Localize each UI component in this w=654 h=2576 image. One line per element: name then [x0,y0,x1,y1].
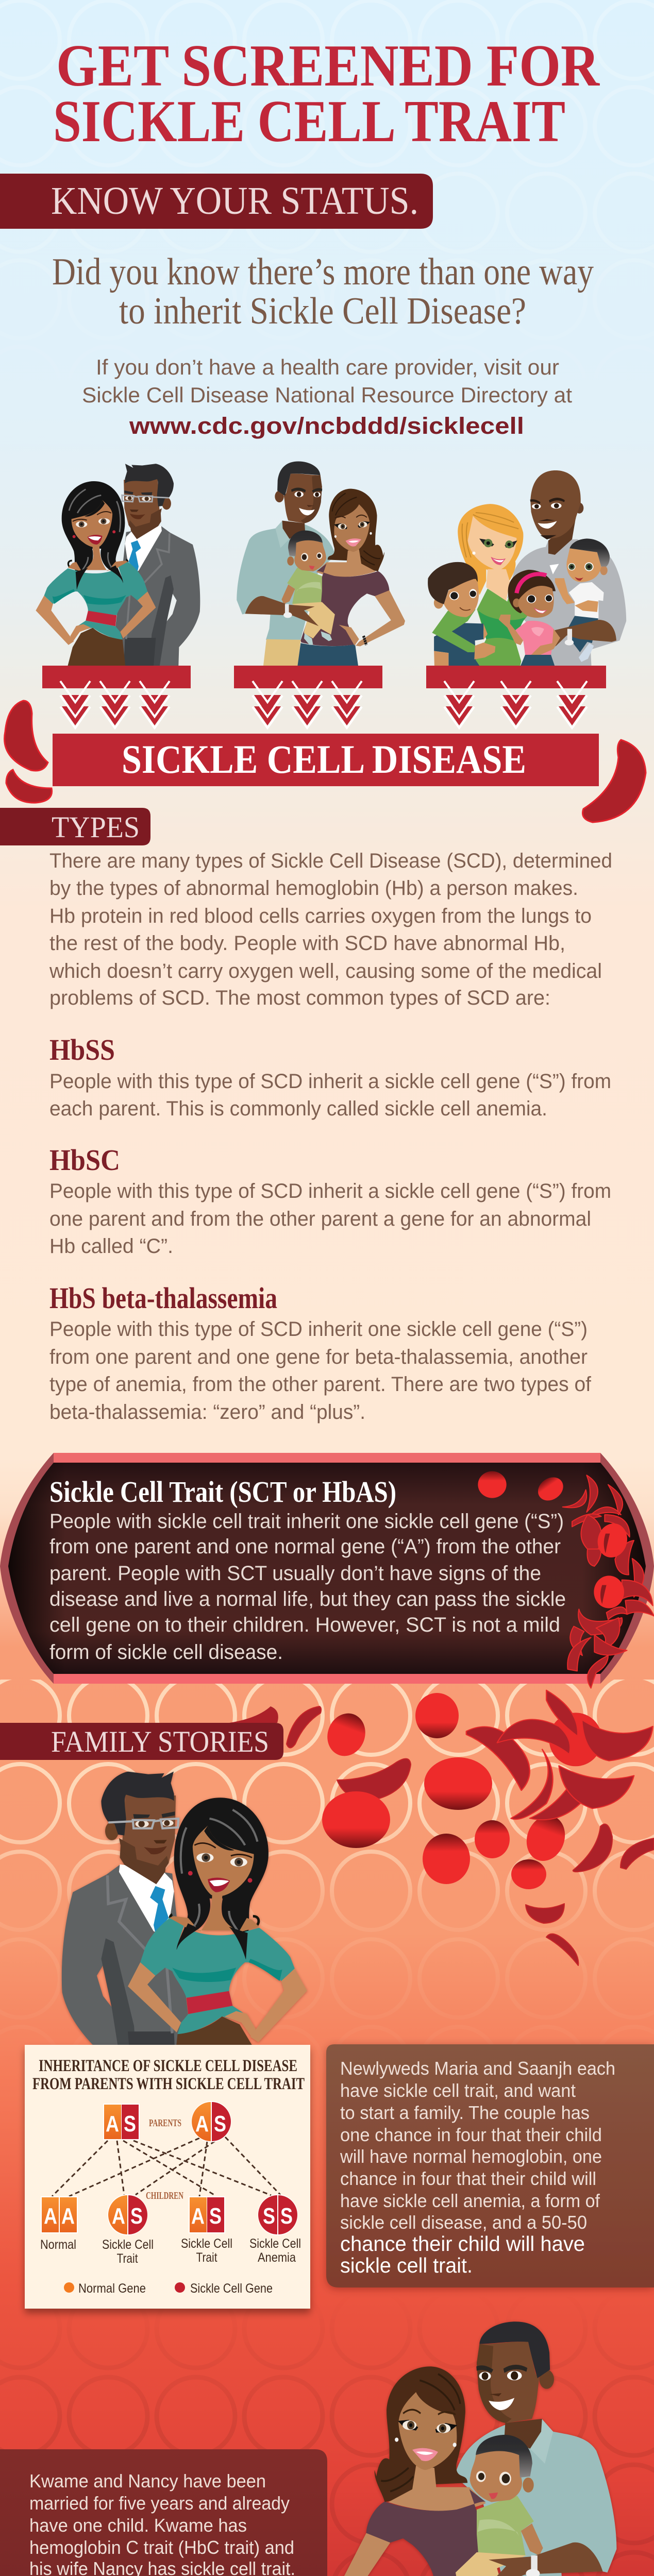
text block: types intro: by the types of abnormal hemoglobin (Hb) a person makes. [49,877,578,900]
inheritance lines [52,2137,280,2196]
section: HbS beta-thalassemia: beta-thalassemia: “zero” and “plus”. [49,1401,365,1423]
banner: know your status: KNOW YOUR STATUS. [51,179,418,223]
arrows: couple [60,681,170,728]
parent token: AS square [103,2104,140,2140]
diagram title [32,2057,305,2093]
arrows: family of five [444,681,587,728]
text block: sickle cell trait: disease and live a normal life, but they can pass the sickle [49,1588,566,1611]
child labels [40,2236,301,2266]
panel: Maria and Saanjh story [326,2044,654,2287]
illustration: Kwame and Nancy family [341,2321,616,2576]
banner: family stories cells behind [229,1706,278,1723]
panel: Kwame and Nancy story: have one child. Kwame has [29,2515,247,2536]
child token: AS circle: S [130,2204,143,2229]
legend: Normal Gene [78,2281,146,2296]
text block: resource directory: If you don’t have a health care provider, visit our [96,355,559,379]
child labels: Sickle Cell [181,2236,232,2251]
diagram title: FROM PARENTS WITH SICKLE CELL TRAIT [32,2075,305,2093]
section: HbSC: Hb called “C”. [49,1235,173,1258]
child token: AA square: A [61,2204,75,2229]
section: HbSS: HbSS [49,1033,115,1066]
text block: sickle cell trait: parent. People with SCT usually don’t have signs of the [49,1562,541,1585]
panel: Kwame and Nancy story: Kwame and Nancy have been [29,2470,266,2492]
section: HbS beta-thalassemia: People with this type of SCD inherit one sickle cell gene (“S”) [49,1318,588,1341]
title: SICKLE CELL TRAIT [53,89,565,155]
panel: Maria and Saanjh story: have sickle cell anemia, a form of [340,2190,600,2211]
text block: types intro: Hb protein in red blood cells carries oxygen from the lungs to [49,905,592,927]
child token: AA square: A [44,2204,57,2229]
section: HbS beta-thalassemia: from one parent and one gene for beta-thalassemia, another [49,1346,588,1368]
panel: sickle cell trait vessel [0,1453,654,1684]
illustration: couple (small) [36,464,200,668]
panel: inheritance of sickle cell disease [25,2045,310,2309]
section: HbS beta-thalassemia: type of anemia, from the other parent. There are two types of [49,1373,592,1396]
text block: types intro [49,850,612,1009]
child token: AS circle [107,2194,147,2235]
parent token: AS circle: A [195,2111,209,2137]
panel: Maria and Saanjh story: sickle cell disease, and a 50-50 [340,2212,587,2233]
panel: Maria and Saanjh story: chance their child will have [340,2232,585,2256]
label: children: CHILDREN [146,2190,183,2201]
title: GET SCREENED FOR [56,33,600,99]
child labels: Trait [116,2251,138,2266]
bar: family of five [426,666,606,688]
label: parents: PARENTS [149,2117,181,2129]
parent token: AS square: A [106,2111,119,2137]
child token: SS circle: S [263,2204,275,2229]
child token: AA square [41,2196,78,2233]
child labels: Sickle Cell [249,2236,301,2251]
panel: Maria and Saanjh story: chance in four that their child will [340,2168,596,2189]
banner: know your status [0,174,433,229]
banner: types [0,808,150,845]
child labels: Normal [40,2238,76,2252]
section: HbSC: one parent and from the other parent a gene for an abnormal [49,1208,591,1230]
section: HbSS [49,1033,611,1120]
child labels: Sickle Cell [102,2238,154,2252]
parent token: AS square: S [124,2111,136,2137]
text block: types intro: There are many types of Sickle Cell Disease (SCD), determined [49,850,612,872]
child labels: Trait [196,2250,217,2265]
panel: Kwame and Nancy story: hemoglobin C trait (HbC trait) and [29,2537,294,2558]
panel: Maria and Saanjh story: will have normal hemoglobin, one [340,2146,602,2167]
child token: AS square [189,2196,225,2233]
banner: family stories: FAMILY STORIES [51,1725,269,1758]
question heading: to inherit Sickle Cell Disease? [119,290,526,332]
illustration: family of three (small) [237,461,405,668]
banner: types: TYPES [52,810,140,844]
legend: Sickle Cell Gene [190,2281,273,2296]
panel: Maria and Saanjh story: one chance in four that their child [340,2124,602,2145]
section: HbSS: People with this type of SCD inherit a sickle cell gene (“S”) from [49,1070,611,1093]
child token: SS circle [258,2194,298,2235]
text block: types intro: which doesn’t carry oxygen well, causing some of the medical [49,960,602,982]
icon: sickle cells around banner [5,701,646,822]
panel: Maria and Saanjh story: to start a family. The couple has [340,2102,590,2123]
question heading [52,251,594,332]
text block: sickle cell trait [49,1510,566,1664]
parent token: AS circle: S [214,2111,226,2137]
bar: couple [42,666,191,688]
icon: blood cell cluster in vessel [478,1471,654,1688]
panel: Maria and Saanjh story: have sickle cell trait, and want [340,2080,576,2101]
text block: resource directory: www.cdc.gov/ncbddd/sicklecell [129,413,524,439]
text block: types intro: problems of SCD. The most common types of SCD are: [49,987,550,1009]
child token: AS square: A [191,2204,205,2229]
text block: sickle cell trait: cell gene on to their children. However, SCT is not a mild [49,1614,560,1636]
section: HbSC: HbSC [49,1143,120,1177]
panel: Maria and Saanjh story: Newlyweds Maria and Saanjh each [340,2058,615,2079]
child labels: Anemia [258,2250,296,2265]
diagram title: INHERITANCE OF SICKLE CELL DISEASE [39,2057,297,2075]
text block: resource directory: Sickle Cell Disease National Resource Directory at [82,383,572,407]
text block: types intro: the rest of the body. People with SCD have abnormal Hb, [49,932,565,955]
panel: Maria and Saanjh story: sickle cell trait. [340,2253,473,2277]
bar: family of three [234,666,382,688]
section: HbSC [49,1143,611,1258]
banner: sickle cell disease: SICKLE CELL DISEASE [122,737,526,782]
parent token: AS circle [191,2101,231,2142]
text block: sickle cell trait: from one parent and one normal gene (“A”) from the other [49,1535,561,1558]
text block: sickle cell trait: form of sickle cell disease. [49,1641,283,1664]
arrows: family of three [253,681,362,728]
child token: SS circle: S [280,2204,293,2229]
text block: sickle cell trait: People with sickle cell trait inherit one sickle cell gene (“S”) [49,1510,564,1533]
title [53,33,600,155]
section: HbS beta-thalassemia: HbS beta-thalassemia [49,1281,277,1315]
section: HbSC: People with this type of SCD inherit a sickle cell gene (“S”) from [49,1180,611,1202]
section: HbS beta-thalassemia [49,1281,592,1423]
illustration: family of five (small) [428,470,626,675]
child token: AS circle: A [112,2204,125,2229]
illustration: Maria and Saanjh [62,1772,307,2076]
text block: resource directory [82,355,572,439]
panel: Kwame and Nancy story [0,2449,327,2576]
child token: AS square: S [209,2204,222,2229]
panel: Kwame and Nancy story: married for five years and already [29,2493,290,2514]
legend [64,2281,273,2296]
heading: sickle cell trait: Sickle Cell Trait (SCT or HbAS) [49,1475,396,1509]
section: HbSS: each parent. This is commonly called sickle cell anemia. [49,1097,547,1120]
icon: falling blood cells [287,1690,654,1965]
